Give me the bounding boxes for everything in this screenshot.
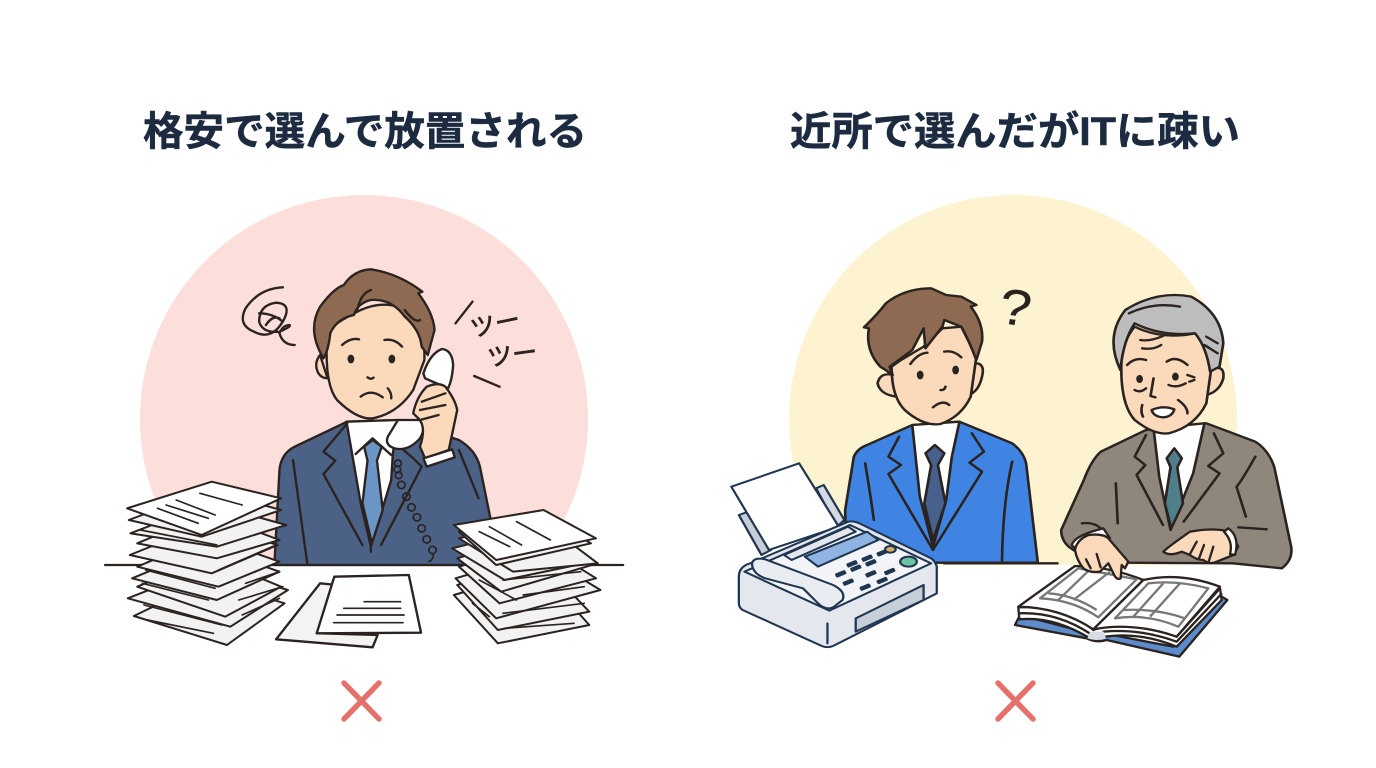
right pile of documents <box>452 510 600 643</box>
man in navy suit <box>274 269 492 565</box>
busy tone marks <box>456 302 539 387</box>
white telephone and hand <box>387 349 457 467</box>
older man in grey suit <box>1061 295 1291 568</box>
illustration: right scene, confused man with older advisor <box>731 279 1291 647</box>
dizzy swirl <box>243 287 295 345</box>
desk line <box>944 560 1057 567</box>
open ledger book <box>1015 566 1227 657</box>
desk line <box>105 561 623 568</box>
left pile of documents <box>127 482 288 645</box>
title: left heading: 格安で選んで放置される <box>143 110 587 154</box>
panel: right background circle <box>789 195 1237 565</box>
coiled phone cord <box>394 460 436 562</box>
panel: left background circle <box>140 195 588 558</box>
icon: right cross mark <box>998 683 1033 719</box>
illustration: open ledger book and pointing hands <box>1015 528 1238 657</box>
title: right heading: 近所で選んだがITに疎い <box>790 110 1240 154</box>
young man in blue suit <box>845 288 1038 563</box>
illustration: left scene, overwhelmed man on the phone <box>105 269 623 647</box>
loose documents on desk <box>276 575 421 647</box>
fax machine <box>731 463 937 647</box>
icon: left cross mark <box>344 683 379 719</box>
busy tone marks: ツー <box>486 338 539 373</box>
question mark: ? <box>995 279 1035 338</box>
pointing hands <box>1072 528 1238 579</box>
busy tone marks: ツー <box>468 306 523 343</box>
